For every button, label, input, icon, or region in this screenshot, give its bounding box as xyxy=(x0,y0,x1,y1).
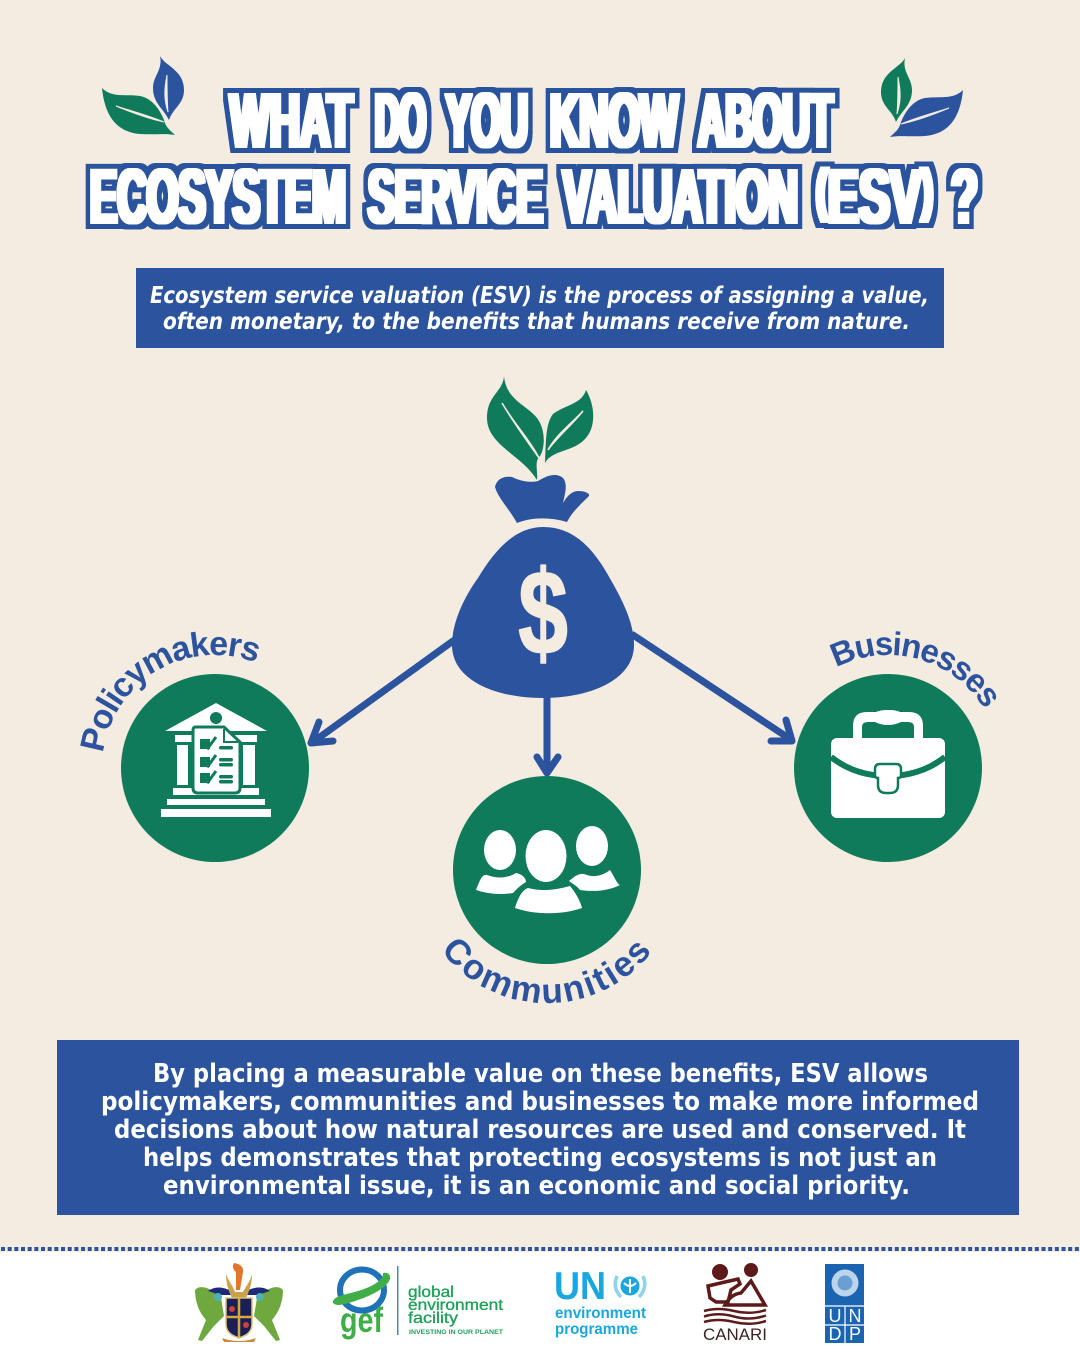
panel: communities xyxy=(446,776,650,1004)
panel: policymakers xyxy=(80,632,309,862)
text: explanation: decisions about how natural resources are used and conserved. It xyxy=(114,1115,966,1145)
logo: global environment facility: INVESTING IN OUR PLANET xyxy=(409,1330,503,1336)
title: SERVICE xyxy=(368,154,543,240)
logo: UNDP: D xyxy=(828,1324,842,1344)
text: explanation: By placing a measurable value on these benefits, ESV allows xyxy=(153,1059,928,1089)
logo: UNDP xyxy=(825,1264,864,1344)
title xyxy=(90,78,978,240)
icon: three people xyxy=(476,826,620,913)
panel: footer xyxy=(0,1249,1080,1350)
icon: sprout leaves xyxy=(487,376,593,480)
text: definition xyxy=(150,283,929,335)
title: ECOSYSTEM xyxy=(90,154,346,240)
title: ESV xyxy=(828,154,921,240)
logo: global environment facility: environment xyxy=(408,1297,504,1314)
title: KNOW xyxy=(550,78,678,164)
title: ) xyxy=(921,158,933,223)
icon: briefcase xyxy=(831,710,945,818)
logo: UNDP: P xyxy=(849,1324,861,1344)
arrow: to businesses xyxy=(633,635,792,741)
logo: UN environment programme: environment xyxy=(555,1305,647,1322)
logo: UN environment programme xyxy=(554,1265,647,1338)
title: DO xyxy=(375,78,426,164)
label: businesses: Businesses xyxy=(830,631,996,706)
title: ( xyxy=(816,158,828,223)
text: explanation xyxy=(101,1059,979,1201)
title: ABOUT xyxy=(698,78,833,164)
icon: money bag with sprout xyxy=(452,376,634,698)
text: explanation: helps demonstrates that protecting ecosystems is not just an xyxy=(143,1143,937,1173)
logo: CANARI: CANARI xyxy=(703,1325,767,1344)
text: explanation: environmental issue, it is an economic and social priority. xyxy=(163,1171,910,1201)
logo: UNDP: N xyxy=(848,1306,862,1326)
arrow: to communities xyxy=(537,696,558,773)
logo: UN environment programme: UN xyxy=(554,1265,606,1308)
text: definition: Ecosystem service valuation (ESV) is the process of assigning a value, xyxy=(150,283,929,309)
label: communities: Communities xyxy=(446,940,650,1004)
logo: UNDP: U xyxy=(828,1306,842,1326)
title: VALUATION xyxy=(563,154,798,240)
logo: global environment facility: global xyxy=(408,1284,454,1301)
title: WHAT xyxy=(230,78,353,164)
label: policymakers: Policymakers xyxy=(80,632,259,751)
text: definition: often monetary, to the benefits that humans receive from nature. xyxy=(163,309,910,335)
panel: explanation banner xyxy=(57,1040,1019,1215)
logo: CANARI xyxy=(703,1263,767,1344)
logo: global environment facility xyxy=(333,1266,504,1340)
title: YOU xyxy=(446,78,528,164)
icon: dollar sign: $ xyxy=(518,546,568,680)
panel: businesses xyxy=(794,631,996,862)
icon: leaves top right xyxy=(881,58,963,137)
arrow: to policymakers xyxy=(311,641,453,743)
logo: UN environment programme: programme xyxy=(555,1321,638,1338)
panel: definition banner xyxy=(136,268,944,348)
logo: coat of arms xyxy=(195,1263,283,1342)
icon: government building with checklist xyxy=(161,703,271,817)
icon: leaves top left xyxy=(102,56,184,135)
text: explanation: policymakers, communities and businesses to make more informed xyxy=(101,1087,979,1117)
logo: global environment facility: gef xyxy=(340,1301,383,1340)
logo: global environment facility: facility xyxy=(408,1310,458,1327)
title: ? xyxy=(951,154,978,240)
